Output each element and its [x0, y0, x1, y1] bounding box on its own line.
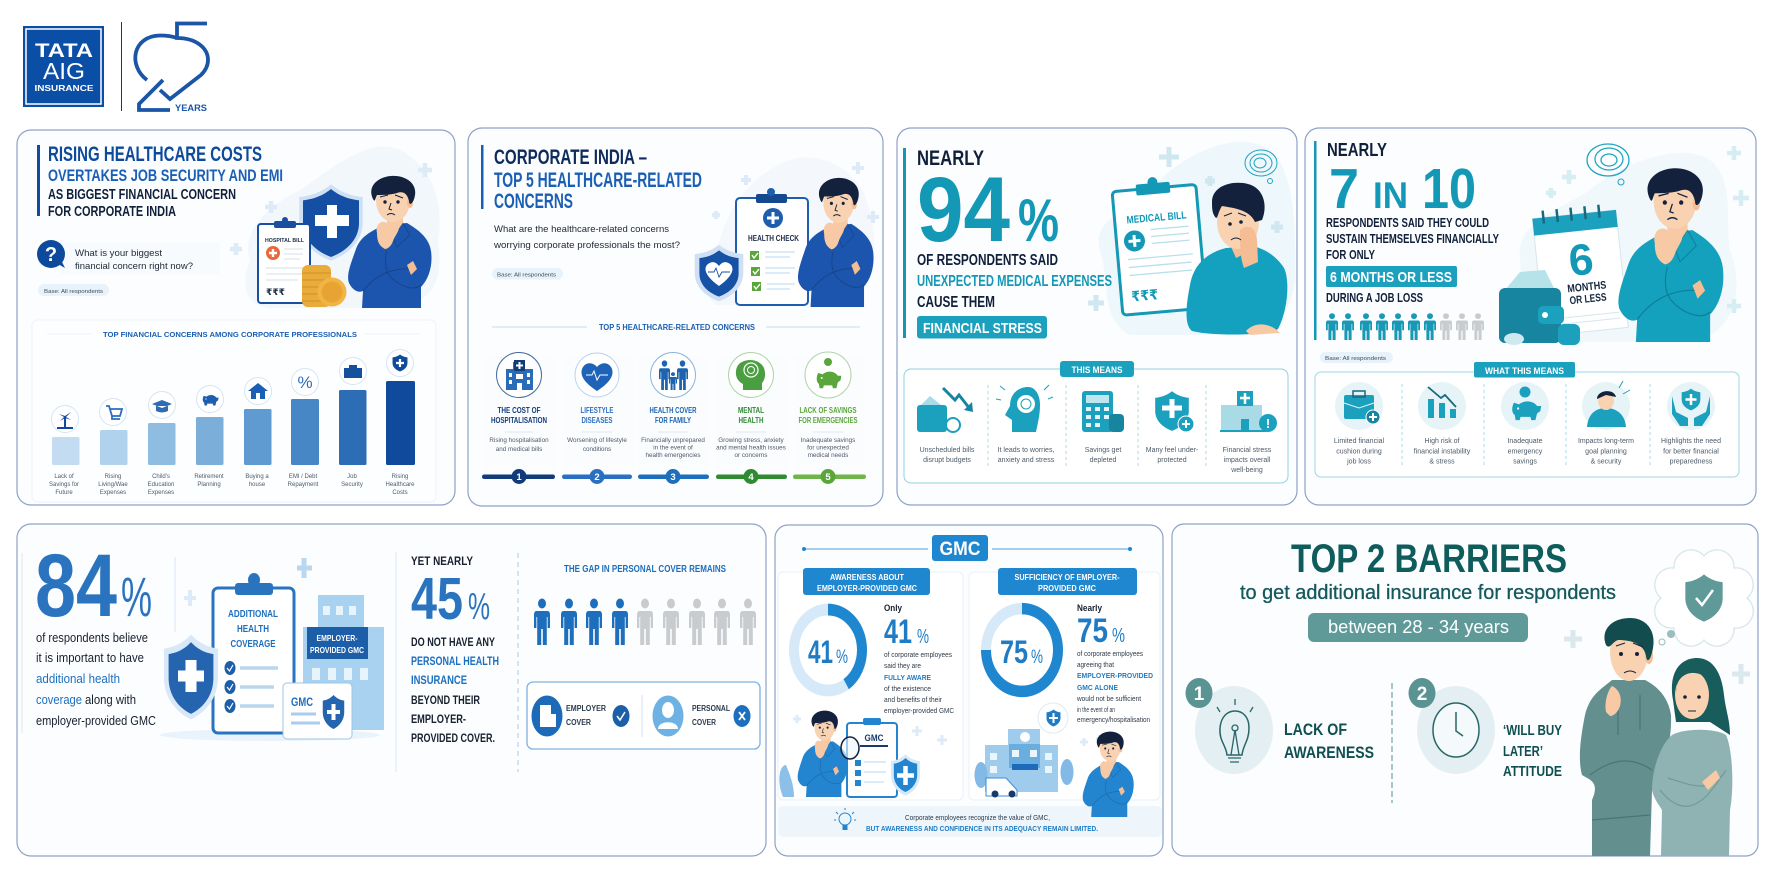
concern 4: mental health: or concerns — [735, 452, 767, 459]
stat block: 45 percent: INSURANCE — [411, 673, 467, 687]
heading: rising healthcare costs: AS BIGGEST FINANCIAL CONCERN — [48, 187, 236, 203]
barrier 1: lack of awareness: 1 — [1194, 684, 1205, 705]
legend: employer versus personal cover: COVER — [566, 718, 591, 727]
heading: corporate India: TOP 5 HEALTHCARE-RELATED — [494, 169, 702, 192]
icon: hospital with alert: ! — [1266, 416, 1270, 431]
captions: disrupt budgets — [923, 457, 971, 464]
bar labels: Education — [148, 482, 174, 488]
box: this means: THIS MEANS — [1072, 365, 1122, 375]
bar labels: Rising — [392, 474, 408, 480]
bar labels: Security — [341, 482, 363, 488]
captions: goal planning — [1585, 448, 1627, 456]
bar labels: Child's — [152, 474, 170, 480]
barrier 2: will buy later: ATTITUDE — [1503, 763, 1562, 780]
concern 2: lifestyle diseases: 2 — [594, 472, 600, 483]
captions: It leads to worries, — [998, 447, 1054, 454]
captions: Impacts long-term — [1578, 438, 1634, 445]
base note: Base: All respondents — [1325, 356, 1386, 362]
icon: hands with shield — [1667, 382, 1715, 430]
stat block: 94 percent: UNEXPECTED MEDICAL EXPENSES — [917, 273, 1112, 290]
illustration: additional coverage clipboard, building, shield, GMC card: PROVIDED GMC — [310, 645, 364, 655]
stat block: 45 percent: DO NOT HAVE ANY — [411, 635, 495, 649]
stat block: 7 in 10: RESPONDENTS SAID THEY COULD — [1326, 216, 1489, 230]
people row: gap in personal cover — [534, 564, 756, 645]
base note — [38, 284, 109, 296]
illustration: thoughtful couple with shield thought — [1564, 550, 1753, 856]
stat block: 7 in 10: FOR ONLY — [1326, 248, 1376, 262]
legend: employer versus personal cover — [527, 682, 760, 749]
question prompt: What is your biggest — [75, 248, 162, 259]
stat block: 84 percent: additional health — [36, 671, 120, 686]
stat block: 7 in 10: SUSTAIN THEMSELVES FINANCIALLY — [1326, 232, 1499, 246]
icon: shield with plus — [1155, 391, 1194, 432]
card: awareness: AWARENESS ABOUT — [830, 572, 905, 582]
people row: 7 of 10 — [1326, 313, 1484, 340]
stat block: 45 percent: BEYOND THEIR — [411, 693, 480, 707]
illustration: additional coverage clipboard, building, shield, GMC card: ADDITIONAL — [228, 609, 278, 620]
bar labels: Lack of — [54, 474, 74, 480]
icon: falling chart — [1418, 382, 1466, 430]
captions: High risk of — [1424, 438, 1460, 445]
captions: protected — [1157, 457, 1187, 464]
concern 3: health cover for family: health emergencies — [646, 452, 700, 459]
captions: & stress — [1429, 458, 1455, 466]
bar labels: EMI / Debt — [289, 474, 318, 480]
panel: 7 in 10 — [1305, 128, 1756, 505]
illustration: hospital and ambulance — [974, 703, 1104, 798]
illustration: additional coverage clipboard, building, shield, GMC card — [160, 558, 384, 741]
stat text: 41 percent: of the existence — [884, 686, 931, 693]
icon: worried head — [996, 385, 1053, 432]
stat block: 7 in 10: IN — [1373, 175, 1408, 216]
donut: 75 percent: % — [1031, 647, 1043, 668]
bar labels: Healthcare — [385, 482, 415, 488]
stat block: 7 in 10: 7 — [1329, 157, 1359, 221]
illustration: calendar, wallet and man — [1499, 144, 1749, 345]
illustration: health check clipboard and man — [695, 157, 879, 307]
illustration: worried man — [1083, 732, 1134, 817]
illustration: medical bill and stressed man — [1088, 142, 1295, 335]
panel: rising healthcare costs — [17, 130, 455, 505]
logo: Tata AIG Insurance: INSURANCE — [34, 83, 94, 93]
stat text: 75 percent: GMC ALONE — [1077, 685, 1118, 692]
base note: Base: All respondents — [44, 289, 103, 295]
bar labels: house — [249, 482, 266, 488]
stat block: 84 percent: it is important to have — [36, 650, 144, 665]
stat text: 75 percent: agreeing that — [1077, 662, 1114, 669]
illustration: additional coverage clipboard, building, shield, GMC card: GMC — [291, 695, 313, 709]
logo: Tata AIG Insurance — [23, 26, 104, 107]
donut: 41 percent: 41 — [808, 634, 833, 670]
stat block: 7 in 10 — [1314, 139, 1499, 340]
stat block: 84 percent: employer-provided GMC — [36, 713, 156, 728]
bar labels: Savings for — [49, 482, 79, 488]
illustration: worried man with hospital bill: HOSPITAL BILL — [265, 238, 305, 244]
stat text: 41 percent: Only — [884, 603, 903, 614]
barrier 2: will buy later: ‘WILL BUY — [1503, 722, 1562, 739]
concern 5: lack of savings: 5 — [825, 472, 831, 483]
stat block: 7 in 10: 6 MONTHS OR LESS — [1330, 269, 1452, 286]
section heading: TOP 5 HEALTHCARE-RELATED CONCERNS — [599, 323, 756, 332]
heading: top 2 barriers — [1240, 537, 1616, 642]
concern 3: health cover for family: Financially unprepared — [641, 437, 705, 444]
icon: hospital with alert — [1220, 391, 1277, 432]
concern 2: lifestyle diseases: LIFESTYLE — [580, 406, 614, 415]
heading: top 2 barriers: to get additional insurance for respondents — [1240, 582, 1616, 604]
concern 3: health cover for family — [638, 352, 709, 484]
bar labels: Living/Wae — [98, 482, 128, 488]
25 years mark: YEARS — [175, 103, 207, 113]
captions: cushion during — [1336, 448, 1382, 456]
bar labels: Buying a — [245, 474, 269, 480]
bar labels — [49, 474, 415, 496]
people row: gap in personal cover: THE GAP IN PERSONAL COVER REMAINS — [564, 564, 726, 575]
captions: Inadequate — [1507, 438, 1543, 445]
concern 1: cost of hospitalisation — [482, 352, 555, 484]
stat block: 94 percent: FINANCIAL STRESS — [923, 320, 1042, 337]
stat block: 94 percent: CAUSE THEM — [917, 294, 995, 311]
captions: preparedness — [1670, 458, 1713, 466]
captions: savings — [1513, 458, 1537, 466]
heading: GMC — [802, 535, 1132, 561]
concern 4: mental health: Growing stress, anxiety — [718, 437, 785, 444]
stat block: 94 percent: % — [1018, 187, 1059, 254]
donut: 41 percent: % — [836, 647, 848, 668]
captions: Many feel under- — [1146, 447, 1199, 454]
heading: corporate India: CORPORATE INDIA – — [494, 146, 647, 169]
stat block: 7 in 10: 10 — [1422, 157, 1476, 221]
icon: briefcase — [1335, 382, 1383, 430]
concern 4: mental health — [716, 352, 787, 484]
donut: 41 percent — [794, 610, 862, 690]
bar icons — [52, 350, 414, 432]
stat block: 84 percent: % — [121, 565, 152, 628]
icon: bulb — [834, 808, 856, 830]
panel: top 2 barriers — [1172, 524, 1758, 856]
heading: GMC: GMC — [940, 539, 981, 560]
concern 3: health cover for family: FOR FAMILY — [655, 416, 691, 425]
captions: Savings get — [1085, 447, 1121, 454]
concern 5: lack of savings: medical needs — [808, 452, 848, 459]
concern 5: lack of savings — [793, 352, 866, 484]
heading: corporate India — [481, 145, 702, 213]
heading: rising healthcare costs: FOR CORPORATE INDIA — [48, 204, 176, 220]
question prompt: financial concern right now? — [75, 261, 193, 272]
concern 2: lifestyle diseases: Worsening of lifestyle — [567, 437, 627, 444]
bar icons: % — [297, 373, 313, 392]
barrier 1: lack of awareness: LACK OF — [1284, 720, 1347, 739]
captions: & security — [1591, 458, 1622, 466]
captions: Highlights the need — [1661, 438, 1721, 445]
base note — [492, 268, 563, 280]
card: awareness — [778, 568, 963, 800]
stat block: 84 percent: 84 — [35, 535, 117, 635]
captions: emergency — [1508, 448, 1543, 456]
captions: financial instability — [1414, 448, 1471, 456]
card: sufficiency: SUFFICIENCY OF EMPLOYER- — [1014, 572, 1120, 582]
stat block: 84 percent: coverage — [36, 692, 82, 707]
stat block: 45 percent: % — [468, 586, 490, 628]
stat text: 75 percent: EMPLOYER-PROVIDED — [1077, 673, 1153, 680]
icon: worried person — [1582, 381, 1630, 430]
legend: employer versus personal cover: COVER — [692, 718, 716, 727]
illustration: man inspecting GMC clipboard — [779, 711, 947, 797]
stat text: 75 percent: % — [1112, 625, 1125, 647]
captions: impacts overall — [1224, 457, 1271, 464]
captions: well-being — [1230, 467, 1263, 474]
concern 1: cost of hospitalisation: HOSPITALISATION — [491, 416, 547, 425]
stat text: 41 percent: 41 — [884, 613, 912, 651]
box: this means — [904, 361, 1288, 483]
legend: employer versus personal cover: EMPLOYER — [566, 704, 606, 713]
base note: Base: All respondents — [497, 272, 556, 278]
card: sufficiency: PROVIDED GMC — [1038, 583, 1096, 593]
stat text: 75 percent: of corporate employees — [1077, 651, 1143, 658]
illustration: calendar, wallet and man: OR LESS — [1569, 291, 1607, 307]
stat block: 45 percent: 45 — [411, 566, 463, 632]
heading: top 2 barriers: between 28 - 34 years — [1328, 617, 1509, 637]
stat text: 41 percent: and benefits of their — [884, 697, 943, 704]
captions: Unscheduled bills — [920, 447, 975, 454]
question prompt: ? — [45, 244, 57, 266]
captions: depleted — [1090, 457, 1117, 464]
concern 4: mental health: 4 — [748, 472, 754, 483]
barrier 2: will buy later: LATER’ — [1503, 743, 1543, 760]
concern 3: health cover for family: HEALTH COVER — [650, 406, 697, 415]
stat text: 75 percent: emergency/hospitalisation — [1077, 717, 1150, 724]
stat block: 94 percent: OF RESPONDENTS SAID — [917, 252, 1058, 269]
barrier 2: will buy later: 2 — [1417, 684, 1427, 705]
card: awareness: EMPLOYER-PROVIDED GMC — [817, 583, 917, 593]
takeaway strip — [778, 806, 1162, 837]
stat block: 84 percent — [22, 535, 156, 733]
panel: top 5 healthcare concerns — [468, 128, 883, 506]
heading: rising healthcare costs — [37, 143, 283, 220]
illustration: worried man with hospital bill — [230, 146, 440, 308]
bar labels: Future — [55, 490, 73, 496]
stat text: 75 percent: in the event of an — [1077, 707, 1115, 714]
concern 4: mental health: MENTAL — [738, 406, 764, 415]
concern 5: lack of savings: Inadequate savings — [801, 437, 855, 444]
stat block: 45 percent — [411, 554, 499, 745]
question text — [493, 224, 680, 251]
chart: top financial concerns — [32, 320, 436, 502]
stat block: 7 in 10: DURING A JOB LOSS — [1326, 291, 1423, 305]
chart title: TOP FINANCIAL CONCERNS AMONG CORPORATE PROFESSIONALS — [103, 330, 357, 339]
bar labels: Planning — [197, 482, 221, 488]
heading: corporate India: CONCERNS — [494, 190, 573, 213]
illustration: worried man with hospital bill: ₹₹₹ — [266, 287, 285, 297]
bar labels: Rising — [105, 474, 121, 480]
logo: Tata AIG Insurance: TATA — [35, 41, 93, 62]
question prompt — [37, 240, 220, 274]
panel: GMC — [775, 525, 1163, 856]
stat block: 45 percent: PROVIDED COVER. — [411, 731, 495, 745]
concern 4: mental health: and mental health issues — [716, 444, 786, 452]
concern 3: health cover for family: in the event of — [653, 444, 693, 452]
illustration: calendar, wallet and man: MONTHS — [1567, 279, 1607, 295]
icon: piggy bank — [1501, 382, 1549, 430]
stat block: 84 percent: along with — [85, 692, 136, 707]
stat text: 75 percent: would not be sufficient — [1076, 696, 1141, 703]
illustration: additional coverage clipboard, building, shield, GMC card: EMPLOYER- — [316, 633, 358, 643]
stat text: 75 percent — [1076, 603, 1153, 724]
panel: 84 percent and 45 percent — [17, 524, 766, 856]
bars — [52, 381, 415, 465]
concern 1: cost of hospitalisation: 1 — [516, 472, 522, 483]
box: what this means: WHAT THIS MEANS — [1485, 366, 1564, 376]
donut: 75 percent: 75 — [1000, 634, 1028, 670]
stat text: 41 percent — [884, 603, 954, 715]
question text: worrying corporate professionals the most? — [493, 240, 680, 251]
donut: 75 percent — [986, 609, 1058, 691]
stat text: 41 percent: said they are — [884, 663, 921, 670]
illustration: medical bill and stressed man: ₹₹₹ — [1131, 286, 1159, 304]
panel: 94 percent — [897, 128, 1297, 505]
stat text: 41 percent: % — [917, 626, 929, 648]
captions: for better financial — [1663, 448, 1719, 456]
stat block: 45 percent: EMPLOYER- — [411, 712, 466, 726]
stat block: 45 percent: YET NEARLY — [411, 554, 473, 568]
captions: anxiety and stress — [998, 457, 1055, 464]
stat block: 94 percent — [903, 147, 1112, 338]
concern 1: cost of hospitalisation: Rising hospitalisation — [489, 437, 549, 444]
stat text: 41 percent: FULLY AWARE — [884, 675, 931, 682]
stat text: 41 percent: employer-provided GMC — [884, 708, 954, 715]
concern 2: lifestyle diseases: DISEASES — [582, 416, 613, 425]
stat block: 94 percent: 94 — [917, 159, 1010, 261]
illustration: medical bill and stressed man: MEDICAL BILL — [1126, 209, 1187, 227]
base note — [1320, 352, 1393, 363]
stat block: 84 percent: of respondents believe — [36, 630, 148, 645]
question text: What are the healthcare-related concerns — [494, 224, 669, 235]
bar labels: Expenses — [100, 490, 126, 496]
bar labels: Retirement — [194, 474, 224, 480]
concern 1: cost of hospitalisation: and medical bills — [496, 446, 542, 453]
barrier 1: lack of awareness: AWARENESS — [1284, 743, 1374, 762]
bar labels: Costs — [392, 490, 408, 496]
concern 2: lifestyle diseases: conditions — [583, 446, 611, 453]
barrier 2: will buy later — [1408, 678, 1562, 780]
legend: employer versus personal cover: PERSONAL — [692, 704, 730, 713]
card: sufficiency — [969, 568, 1160, 800]
illustration: additional coverage clipboard, building, shield, GMC card: HEALTH — [237, 624, 269, 635]
heading: top 2 barriers: TOP 2 BARRIERS — [1291, 537, 1567, 581]
icon: calculator — [1082, 391, 1124, 432]
concern 5: lack of savings: FOR EMERGENCIES — [798, 416, 858, 425]
stat text: 75 percent: Nearly — [1077, 603, 1103, 614]
logo: Tata AIG Insurance: AIG — [43, 58, 85, 84]
heading: rising healthcare costs: OVERTAKES JOB SECURITY AND EMI — [48, 166, 283, 185]
captions — [920, 447, 1272, 474]
barrier 1: lack of awareness — [1186, 678, 1374, 774]
concern 5: lack of savings: LACK OF SAVINGS — [800, 406, 857, 415]
takeaway strip: BUT AWARENESS AND CONFIDENCE IN ITS ADEQUACY REMAIN LIMITED. — [866, 824, 1098, 833]
concern 2: lifestyle diseases — [562, 353, 633, 484]
takeaway strip: Corporate employees recognize the value of GMC, — [905, 813, 1050, 822]
stat block: 94 percent: NEARLY — [917, 147, 984, 170]
stat text: 75 percent: 75 — [1077, 612, 1108, 650]
bar labels: Job — [347, 474, 357, 480]
bar labels: Repayment — [288, 482, 319, 488]
stat block: 45 percent: PERSONAL HEALTH — [411, 654, 499, 668]
stat block: 7 in 10: NEARLY — [1327, 139, 1388, 160]
25 years mark — [121, 22, 208, 113]
stat text: 41 percent: of corporate employees — [884, 652, 952, 659]
bar labels: Expenses — [148, 490, 174, 496]
illustration: man inspecting GMC clipboard: GMC — [864, 733, 884, 743]
captions: job loss — [1346, 458, 1371, 466]
concern 4: mental health: HEALTH — [738, 416, 764, 425]
illustration: health check clipboard and man: HEALTH CHECK — [748, 234, 799, 243]
heading: rising healthcare costs: RISING HEALTHCARE COSTS — [48, 143, 262, 166]
icon: wallet and falling arrow — [917, 388, 973, 432]
captions: Financial stress — [1223, 447, 1272, 454]
illustration: additional coverage clipboard, building, shield, GMC card: COVERAGE — [230, 639, 276, 650]
concern 1: cost of hospitalisation: THE COST OF — [498, 406, 541, 415]
concern 5: lack of savings: for unexpected — [807, 444, 849, 452]
concern 3: health cover for family: 3 — [670, 472, 676, 483]
captions: Limited financial — [1334, 438, 1385, 445]
box: what this means — [1315, 362, 1739, 477]
captions — [1334, 438, 1721, 466]
illustration: calendar, wallet and man: 6 — [1566, 235, 1596, 286]
